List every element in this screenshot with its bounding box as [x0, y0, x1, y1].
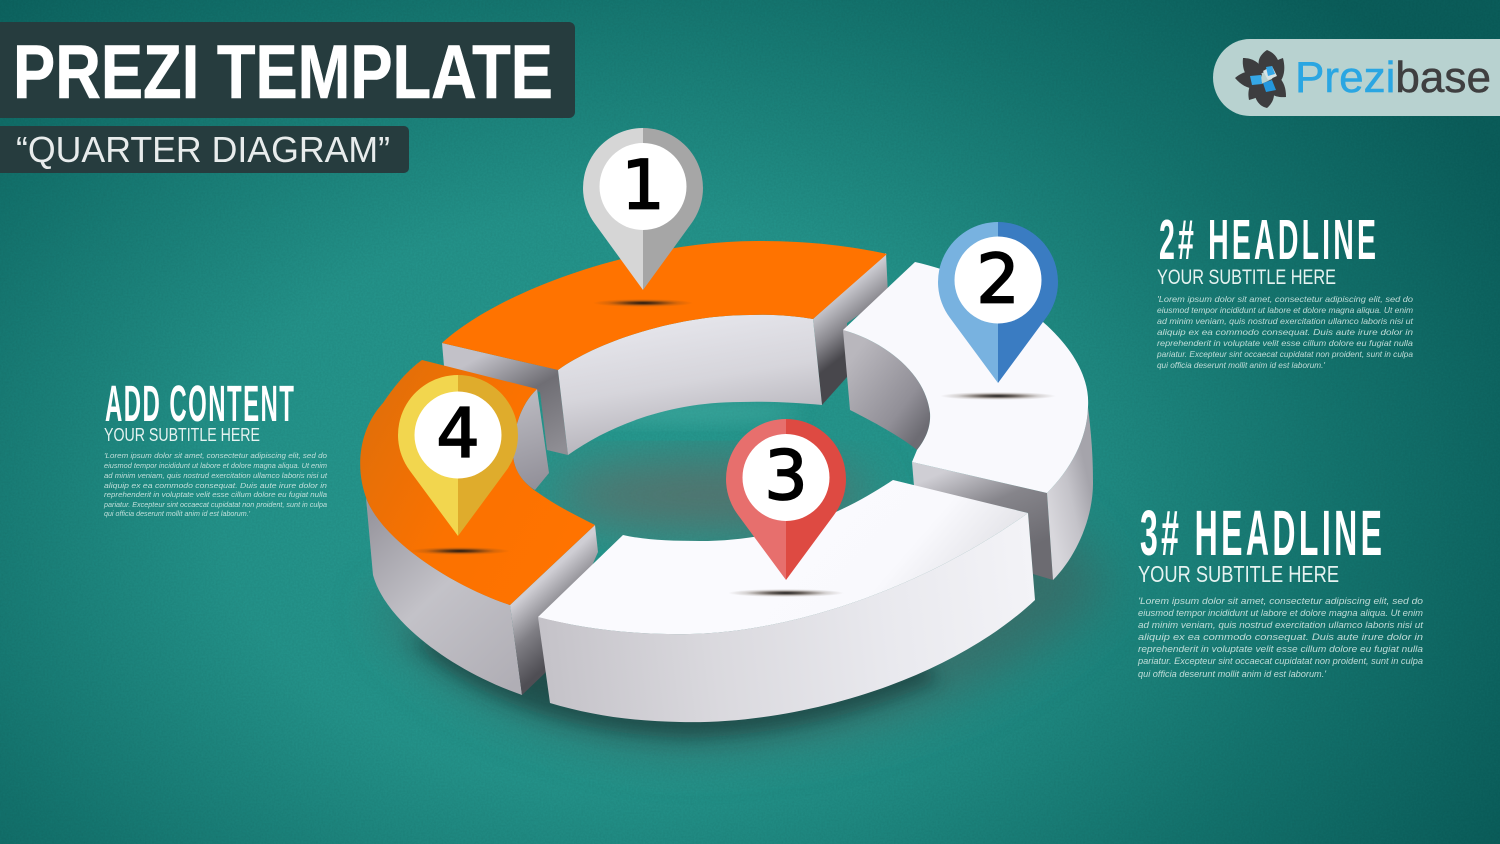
- text block: add content: reprehenderit in voluptate velit esse cillum dolore eu fugiat nulla: [104, 490, 327, 499]
- text block: 2# headline: aliquip ex ea commodo consequat. Duis aute irure dolor in: [1157, 327, 1413, 337]
- cut face: [912, 462, 1053, 580]
- text block: 3# headline: 3# HEADLINE: [1140, 497, 1382, 569]
- text block: add content: YOUR SUBTITLE HERE: [104, 425, 260, 445]
- pin 4: 4: [436, 394, 480, 474]
- cut face: [510, 525, 598, 695]
- text block: add content: ADD CONTENT: [105, 376, 294, 433]
- pin 1: 1: [621, 146, 665, 226]
- ring shadow on the ground: [375, 400, 1110, 748]
- pin 3: [726, 419, 846, 597]
- text block: 3# headline: reprehenderit in voluptate velit esse cillum dolore eu fugiat nulla: [1138, 644, 1423, 655]
- text block: 2# headline: eiusmod tempor incididunt ut labore et dolore magna aliqua. Ut enim: [1157, 305, 1413, 315]
- text block: 3# headline: eiusmod tempor incididunt ut labore et dolore magna aliqua. Ut enim: [1138, 608, 1423, 619]
- right cut face: [813, 253, 888, 405]
- inner wall: [513, 389, 549, 490]
- inner wall: [558, 315, 822, 455]
- ring segment 1: orange top: [442, 241, 888, 455]
- outer wall: [538, 513, 1035, 722]
- text block: 3# headline: 'Lorem ipsum dolor sit amet, consectetur adipiscing elit, sed do: [1138, 596, 1423, 607]
- pin 3: 3: [764, 437, 808, 516]
- text block: 2# headline: 'Lorem ipsum dolor sit amet, consectetur adipiscing elit, sed do: [1157, 294, 1413, 304]
- text block: add content: qui officia deserunt mollit anim id est laborum.': [104, 509, 251, 518]
- orange top face: [442, 241, 887, 370]
- pin 1: [583, 128, 703, 307]
- text block: add content: eiusmod tempor incididunt ut labore et dolore magna aliqua. Ut enim: [104, 461, 327, 470]
- inner wall: [843, 330, 930, 450]
- orange top face: [360, 360, 595, 605]
- pin 4: [398, 375, 518, 555]
- logo: Prezibase: [1213, 39, 1500, 116]
- text block: 3# headline: [1137, 497, 1423, 680]
- title banner: PREZI TEMPLATE: [13, 30, 553, 115]
- pin 2: 2: [976, 240, 1020, 320]
- text block: 2# headline: 2# HEADLINE: [1159, 207, 1376, 272]
- outer wall: [1047, 407, 1093, 580]
- outer wall: [366, 498, 522, 695]
- logo wordmark: Prezibase: [1295, 53, 1491, 102]
- subtitle banner: “QUARTER DIAGRAM”: [16, 129, 390, 170]
- ring segment 4: orange left: [360, 360, 598, 695]
- text block: 3# headline: qui officia deserunt mollit anim id est laborum.': [1138, 669, 1327, 680]
- text block: add content: pariatur. Excepteur sint occaecat cupidatat non proident, sunt in culpa: [103, 500, 327, 509]
- text block: 2# headline: pariatur. Excepteur sint occaecat cupidatat non proident, sunt in culpa: [1156, 349, 1413, 359]
- text block: 3# headline: pariatur. Excepteur sint occaecat cupidatat non proident, sunt in culpa: [1137, 656, 1423, 667]
- text block: add content: aliquip ex ea commodo consequat. Duis aute irure dolor in: [104, 481, 327, 490]
- text block: 2# headline: YOUR SUBTITLE HERE: [1157, 266, 1336, 289]
- text block: 2# headline: [1156, 207, 1414, 370]
- text block: add content: [103, 376, 328, 518]
- text block: 3# headline: YOUR SUBTITLE HERE: [1138, 561, 1339, 587]
- pin 2: [938, 222, 1058, 400]
- text block: 3# headline: aliquip ex ea commodo consequat. Duis aute irure dolor in: [1138, 632, 1423, 643]
- text block: 2# headline: ad minim veniam, quis nostrud exercitation ullamco laboris nisi ut: [1157, 316, 1414, 326]
- top face: [843, 262, 1088, 493]
- ring segment 2: white right: [843, 262, 1093, 580]
- top face: [538, 480, 1028, 634]
- text block: 3# headline: ad minim veniam, quis nostrud exercitation ullamco laboris nisi ut: [1138, 620, 1423, 631]
- icon: logo flower: [1235, 50, 1286, 108]
- text block: 2# headline: qui officia deserunt mollit anim id est laborum.': [1157, 360, 1325, 370]
- left cut face: [442, 343, 568, 455]
- text block: add content: ad minim veniam, quis nostrud exercitation ullamco laboris nisi ut: [104, 471, 328, 480]
- text block: 2# headline: reprehenderit in voluptate velit esse cillum dolore eu fugiat nulla: [1157, 338, 1413, 348]
- ring segment 3: white bottom: [538, 480, 1035, 722]
- text block: add content: 'Lorem ipsum dolor sit amet, consectetur adipiscing elit, sed do: [104, 451, 327, 460]
